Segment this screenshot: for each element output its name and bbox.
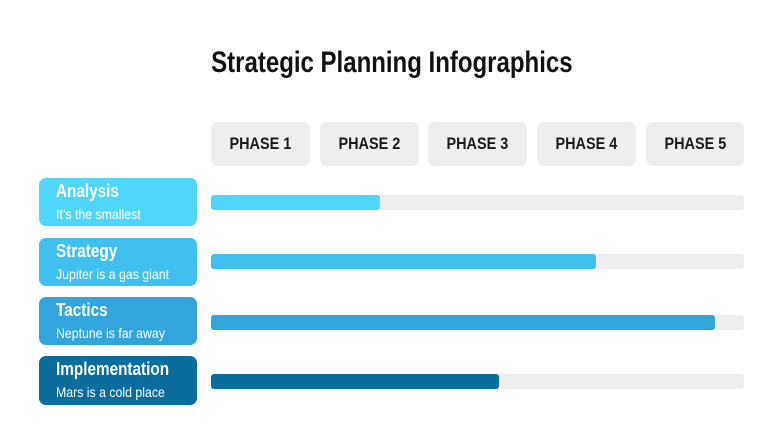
label: strategy: Strategy xyxy=(56,241,117,261)
bar: strategy xyxy=(211,254,744,269)
title: Strategic Planning Infographics xyxy=(211,46,572,79)
label: analysis: Analysis xyxy=(56,181,119,201)
phase header 1 xyxy=(211,122,310,166)
label: analysis xyxy=(39,178,197,226)
phase header 5: PHASE 5 xyxy=(664,134,726,153)
bar: analysis xyxy=(211,195,744,210)
phase header 1: PHASE 1 xyxy=(230,134,291,153)
phase header 4 xyxy=(537,122,636,166)
label: strategy: Jupiter is a gas giant xyxy=(56,266,169,282)
bar: implementation xyxy=(211,374,744,389)
label: tactics: Tactics xyxy=(56,300,108,320)
phase header 3: PHASE 3 xyxy=(447,134,508,153)
label: implementation: Implementation xyxy=(56,359,169,379)
phase header 2: PHASE 2 xyxy=(339,134,400,153)
label: implementation xyxy=(39,356,197,405)
label: analysis: It’s the smallest xyxy=(56,206,141,222)
phase header 4: PHASE 4 xyxy=(556,134,617,153)
phase header 5 xyxy=(646,122,744,166)
bar: tactics xyxy=(211,315,744,330)
phase header 2 xyxy=(320,122,419,166)
label: strategy xyxy=(39,238,197,286)
phase header 3 xyxy=(428,122,527,166)
label: tactics: Neptune is far away xyxy=(56,325,165,341)
label: implementation: Mars is a cold place xyxy=(56,384,165,400)
label: tactics xyxy=(39,297,197,345)
